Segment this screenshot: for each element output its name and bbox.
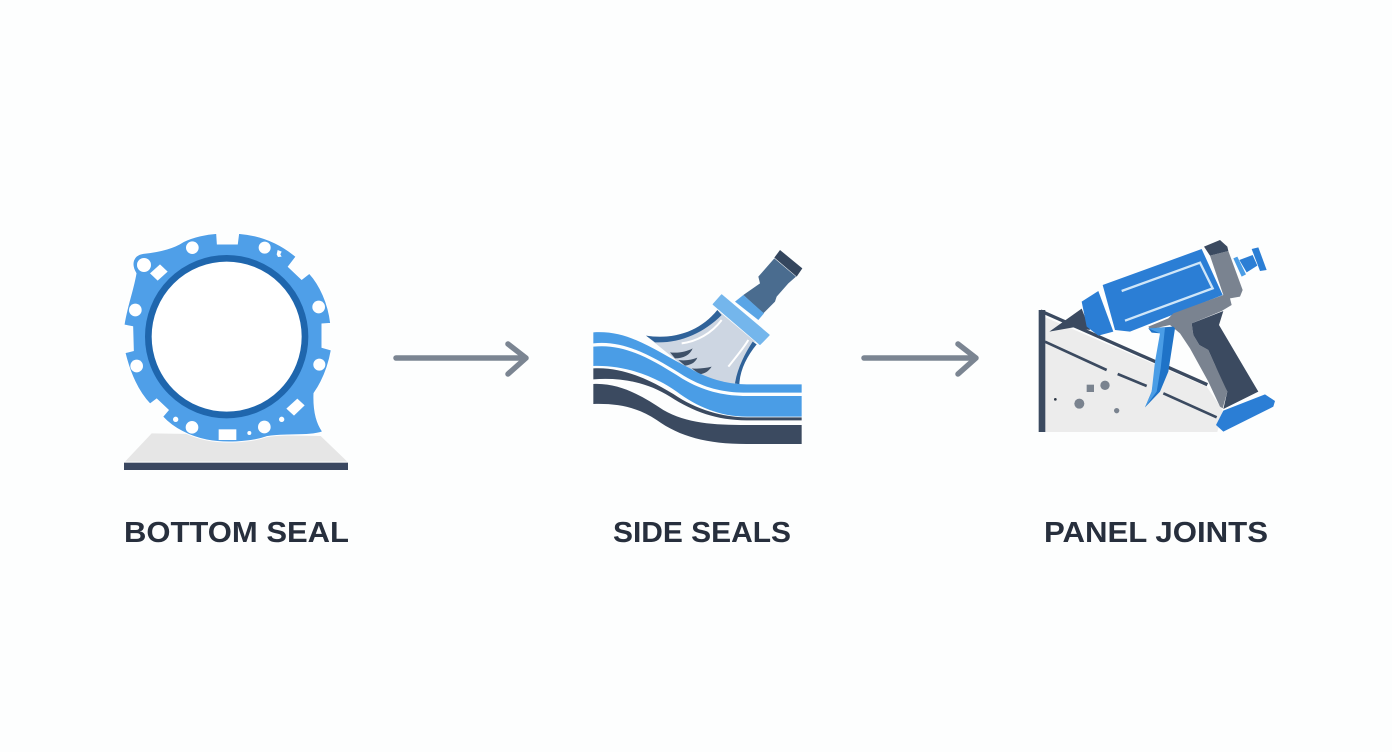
brush handle <box>743 250 802 313</box>
gun grip and frame <box>1148 240 1258 409</box>
platform <box>124 433 348 470</box>
gasket holes <box>129 241 325 440</box>
panel surface <box>1039 310 1223 432</box>
icon: panel joints caulk gun <box>1039 240 1275 432</box>
gun plunger <box>1233 247 1267 277</box>
icon: side seals brush over layers <box>593 250 802 444</box>
inner dark ring <box>148 258 305 415</box>
gun base <box>1216 394 1275 432</box>
label: bottom seal: BOTTOM SEAL <box>124 517 349 549</box>
gun trigger <box>1145 327 1175 407</box>
arrow 2 <box>864 344 976 374</box>
icon: bottom seal gasket ring <box>124 233 348 470</box>
sealant layers <box>593 332 802 393</box>
brush bristles <box>646 310 757 385</box>
label: panel joints: PANEL JOINTS <box>1044 517 1268 549</box>
label: side seals: SIDE SEALS <box>613 517 791 549</box>
brush ferrule <box>713 295 769 344</box>
gasket body <box>124 233 331 442</box>
gun tube <box>1082 249 1223 336</box>
arrow 1 <box>396 344 526 374</box>
gun nozzle <box>1049 309 1090 332</box>
